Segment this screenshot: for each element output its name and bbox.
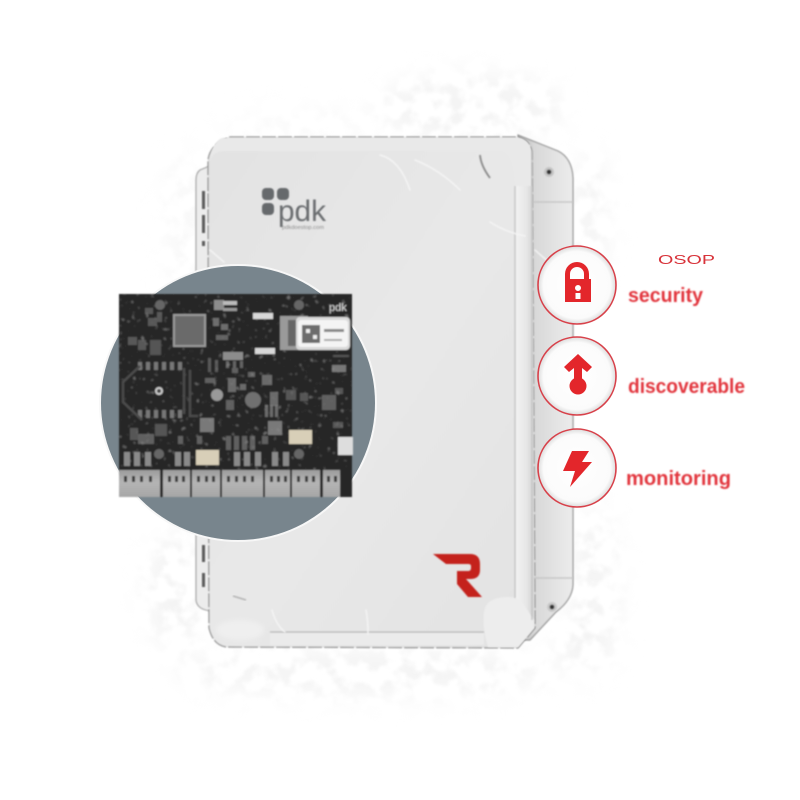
OSOP logo: OSOP (658, 253, 715, 267)
R logo (433, 554, 482, 597)
lid and flange edges (515, 150, 573, 620)
front lid (208, 137, 535, 648)
board logo: pdk (329, 302, 347, 314)
discoverable disc (538, 337, 616, 415)
screw bottom (547, 602, 557, 612)
lid raised right band (515, 186, 534, 622)
pdk logo (262, 188, 327, 231)
monitoring label: monitoring (626, 468, 731, 490)
chip row left (138, 362, 182, 418)
feature: monitoring (538, 429, 731, 507)
lid bottom right corner (484, 597, 534, 647)
mounting holes (154, 300, 304, 459)
mounting slots (202, 191, 205, 587)
pcb fine detail (119, 294, 352, 470)
security label: security (628, 285, 704, 307)
rear right flange (518, 135, 573, 640)
logo url: pdkdoestop.com (282, 225, 324, 231)
logo word: pdk (278, 195, 327, 228)
network module (280, 316, 350, 350)
security disc (538, 246, 616, 324)
lid smudge (233, 596, 246, 600)
enclosure (196, 135, 573, 648)
connector labels (253, 313, 275, 354)
rear left flange (196, 165, 212, 611)
diodes row (124, 452, 289, 466)
inner lid edge shadow (270, 631, 484, 633)
pcb base (119, 294, 352, 497)
main chip (174, 315, 205, 346)
water splash background (156, 84, 608, 688)
icon: arrow (564, 354, 592, 394)
lid top lip (210, 138, 531, 190)
circuit board (119, 294, 353, 497)
trace outline (123, 366, 198, 420)
logo squares (262, 188, 289, 215)
monitoring disc (538, 429, 616, 507)
feature: security (538, 246, 704, 324)
center capacitor (155, 387, 261, 408)
feature: discoverable (538, 337, 745, 415)
discoverable label: discoverable (628, 376, 745, 398)
product infographic (101, 84, 746, 688)
inset circle (99, 264, 377, 542)
small components (128, 300, 349, 372)
screw top (544, 167, 554, 177)
water streaks on enclosure (210, 155, 560, 634)
icon: bolt (563, 451, 592, 487)
terminal blocks (119, 470, 340, 497)
relays (196, 430, 353, 465)
center components (130, 368, 343, 450)
lower corner water (216, 620, 264, 640)
lid notch (480, 155, 490, 178)
lid bottom lip (270, 633, 484, 645)
icon: lock (565, 262, 591, 302)
terminal pins (124, 476, 337, 482)
